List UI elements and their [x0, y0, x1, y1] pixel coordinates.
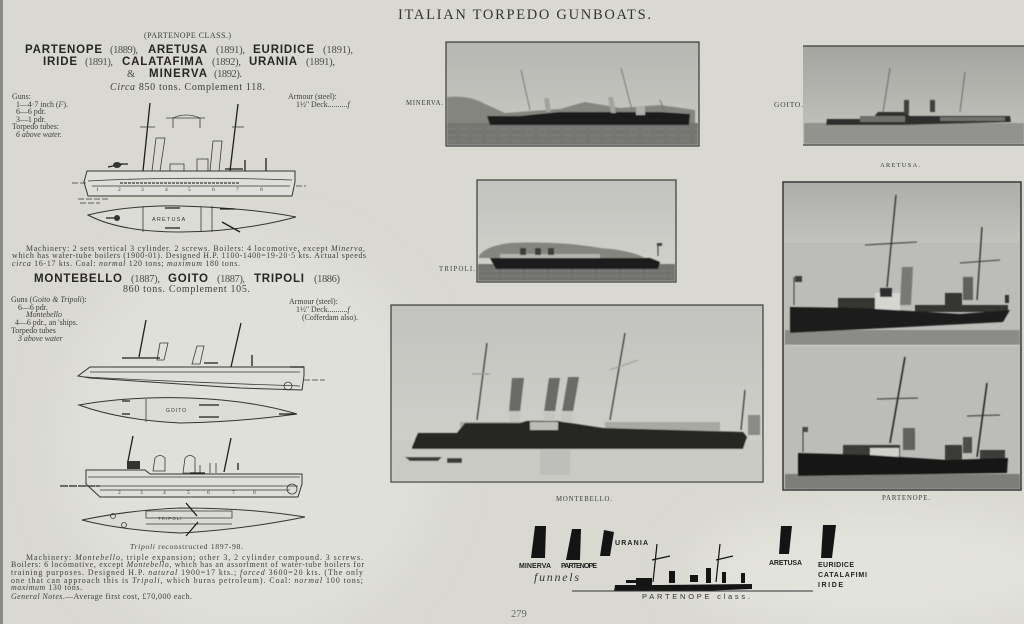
machinery text: [12, 244, 366, 268]
icon: Aretusa funnel: [779, 526, 792, 554]
photo: Tripoli: [477, 180, 676, 282]
ship names heading: URANIA: [249, 56, 297, 68]
ship names heading: GOITO: [168, 273, 208, 285]
caption: Aretusa: ARETUSA.: [880, 162, 920, 169]
photo: Aretusa and Partenope plate: [783, 182, 1021, 490]
page number: 279: [511, 609, 527, 620]
label: Partenope funnel: PARTENOPE: [561, 563, 597, 570]
diagram: Aretusa elevation: 6: [212, 187, 215, 193]
diagram: Aretusa elevation: 5: [188, 187, 191, 193]
label: Euridice group: [818, 562, 867, 589]
ship names heading: [25, 44, 353, 80]
panel: Partenope class data: [12, 31, 366, 268]
class label: (PARTENOPE CLASS.): [144, 31, 231, 40]
label: Urania funnel: URANIA: [615, 540, 648, 547]
photo: Goito: [803, 46, 1024, 145]
diagram: Tripoli deck plan: [82, 503, 305, 536]
title: ITALIAN TORPEDO GUNBOATS.: [398, 7, 651, 23]
machinery text: circa 16-17 kts. Coal: normal 120 tons; maximum 180 tons.: [12, 259, 240, 268]
diagram: Tripoli elevation: 3: [140, 490, 143, 496]
armour note: [288, 92, 351, 109]
guns list: Guns (Goito & Tripoli):: [11, 295, 87, 304]
diagram: Aretusa deck plan: [88, 206, 296, 232]
armour note: Armour (steel):: [288, 92, 337, 101]
ship names heading: (1891),: [216, 45, 245, 56]
caption: Minerva: MINERVA.: [406, 100, 443, 107]
guns list: 3—1 pdr.: [16, 115, 46, 124]
panel: funnel identification sketch: [519, 525, 867, 601]
icon: Minerva funnel: [531, 526, 546, 558]
label: Partenope class: PARTENOPE class.: [642, 592, 750, 601]
photo: Minerva: [446, 42, 699, 146]
ship names heading: ARETUSA: [148, 44, 207, 56]
caption: Tripoli: TRIPOLI.: [439, 266, 475, 273]
guns list: [12, 92, 68, 139]
armour note: 1½" Deck..........f: [296, 305, 351, 314]
caption: Partenope: PARTENOPE.: [882, 495, 930, 502]
photo: Montebello: [391, 305, 763, 482]
guns list: 6—6 pdr.: [16, 107, 46, 116]
guns list: 1—4·7 inch (F).: [16, 100, 68, 109]
machinery text: General Notes.—Average first cost, £70,000 each.: [11, 592, 192, 601]
armour note: [289, 297, 358, 322]
guns list: [11, 295, 87, 343]
ship names heading: (1891),: [85, 57, 113, 68]
ship names heading: IRIDE: [43, 56, 77, 68]
diagram: Aretusa deck plan: ARETUSA: [152, 217, 186, 223]
diagram: Tripoli elevation: [60, 436, 302, 497]
diagram: Tripoli elevation: 5: [187, 490, 190, 496]
diagram: Montebello elevation: [78, 320, 325, 390]
label: funnels: funnels: [534, 570, 579, 584]
caption: Goito: GOITO.: [774, 100, 803, 109]
ship names heading: EURIDICE: [253, 44, 314, 56]
diagram: Aretusa elevation: [72, 103, 306, 203]
tonnage and complement: Circa 850 tons. Complement 118.: [110, 82, 265, 93]
guns list: 4—6 pdr., an 'ships.: [15, 318, 78, 327]
diagram: Tripoli deck plan: TRIPOLI: [158, 516, 183, 521]
label: Euridice group: IRIDE: [818, 582, 843, 589]
caption: Montebello: MONTEBELLO.: [556, 496, 612, 503]
diagram: Aretusa elevation: 1: [96, 187, 99, 193]
label: Aretusa funnel: ARETUSA: [769, 560, 802, 567]
ship names heading: CALATAFIMA: [122, 56, 203, 68]
diagram: Aretusa elevation: 7: [236, 187, 239, 193]
ship names heading: [34, 273, 340, 285]
icon: Partenope class ship silhouette: [614, 544, 752, 591]
icon: Euridice funnel: [821, 525, 836, 558]
diagram: Aretusa elevation: 8: [260, 187, 263, 193]
ship names heading: (1889),: [110, 45, 138, 56]
diagram: Goito deck plan: GOITO: [166, 408, 187, 414]
diagram: Tripoli elevation: 6: [207, 490, 210, 496]
diagram: Tripoli elevation: 7: [232, 490, 235, 496]
guns list: Torpedo tubes:: [12, 122, 59, 131]
tonnage and complement: 860 tons. Complement 105.: [123, 284, 250, 295]
armour note: Armour (steel):: [289, 297, 338, 306]
guns list: Guns:: [12, 92, 31, 101]
diagram: Aretusa elevation: 3: [141, 187, 144, 193]
machinery text: Machinery: 2 sets vertical 3 cylinder. 2 screws. Boilers: 4 locomotive, except Minerva,: [26, 244, 365, 253]
machinery text: Machinery: Montebello, triple expansion; other 3, 2 cylinder compound. 3 screws.: [26, 553, 363, 562]
ship names heading: (1892),: [212, 57, 241, 68]
guns list: 6—6 pdr.: [18, 303, 48, 312]
machinery text: Boilers: 6 locomotive, except Montebello, which has an assortment of water-tube boilers for: [11, 560, 364, 569]
ship names heading: MINERVA: [149, 68, 207, 80]
ship names heading: TRIPOLI: [254, 273, 304, 285]
diagram: Tripoli elevation: 4: [163, 490, 166, 496]
ship names heading: (1891),: [323, 45, 353, 56]
ship: Aretusa: [785, 195, 1020, 345]
diagram: Tripoli elevation: 8: [253, 490, 256, 496]
diagram: Tripoli elevation: 2: [118, 490, 121, 496]
ship: Partenope: [785, 345, 1020, 489]
ship names heading: (1886): [314, 274, 340, 285]
ship names heading: (1887),: [217, 274, 245, 285]
label: Euridice group: CATALAFIMI: [818, 572, 867, 579]
guns list: Torpedo tubes: [11, 326, 56, 335]
ship names heading: (1891),: [306, 57, 335, 68]
diagram: Aretusa elevation: 2: [118, 187, 121, 193]
ship names heading: &: [127, 69, 135, 80]
diagram: Goito deck plan: [79, 398, 297, 423]
panel: Montebello class data: [11, 273, 364, 601]
armour note: 1½" Deck..........f: [296, 100, 351, 109]
label: Euridice group: EURIDICE: [818, 562, 854, 569]
horizon line: [572, 590, 813, 592]
machinery text: maximum 130 tons.: [11, 583, 82, 592]
machinery text: training purposes. Designed H.P. natural 1900=17 kts.; forced 3600=20 kts. (The only: [11, 568, 363, 577]
diagram caption: Tripoli reconstructed 1897-98.: [130, 542, 243, 551]
guns list: 3 above water: [17, 334, 64, 343]
machinery text: [11, 553, 364, 601]
ship names heading: MONTEBELLO: [34, 273, 122, 285]
ship names heading: (1892).: [214, 69, 242, 80]
icon: Partenope funnel: [566, 529, 581, 560]
label: Minerva funnel: MINERVA: [519, 563, 551, 570]
guns list: Montebello: [25, 310, 62, 319]
icon: Urania funnel: [600, 530, 614, 556]
diagram: Aretusa elevation: 4: [165, 187, 168, 193]
ship names heading: PARTENOPE: [25, 44, 102, 56]
ship names heading: (1887),: [131, 274, 160, 285]
armour note: (Cofferdam also).: [302, 313, 358, 322]
machinery text: which has water-tube boilers (1900-01). Designed H.P. 1100-1400=19-20·5 kts. Actual speeds: [12, 251, 366, 260]
guns list: 6 above water.: [16, 130, 62, 139]
machinery text: one that can approach this is Tripoli, which burns petroleum). Coal: normal 100 tons;: [11, 576, 363, 585]
